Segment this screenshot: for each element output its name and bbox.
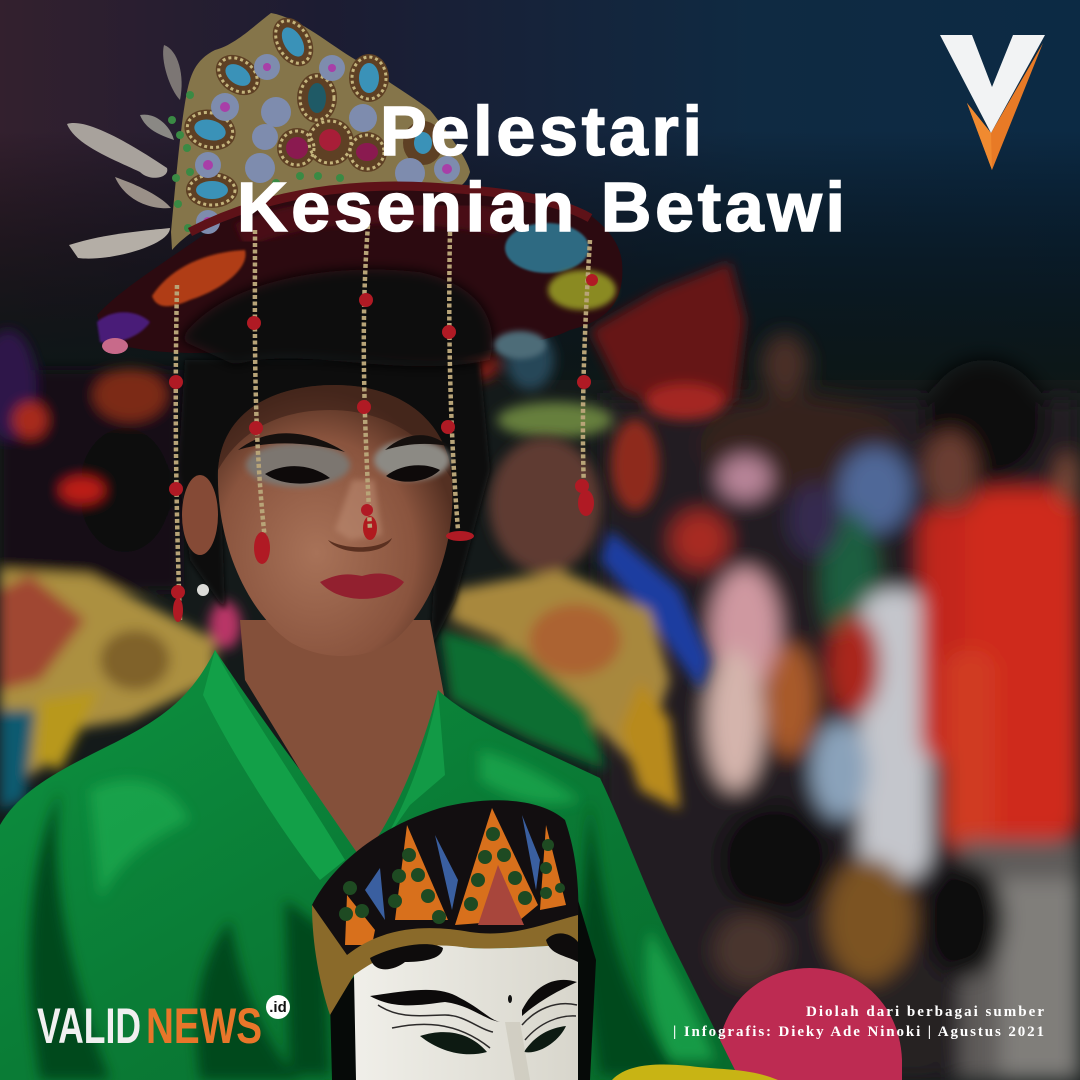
- eye shadow left: [246, 443, 350, 487]
- dark shadow around mask: [330, 900, 596, 1080]
- title line 2: Kesenian Betawi: [237, 168, 845, 246]
- News word: NEWS: [146, 998, 262, 1054]
- forehead pendant: [363, 516, 377, 540]
- left background dancer: [0, 330, 241, 810]
- headdress blue triangles: [365, 815, 540, 920]
- hat crown: gold beaded fan: [67, 10, 470, 259]
- face: [218, 385, 452, 656]
- feather lower left: [69, 228, 170, 259]
- green robe: [0, 650, 740, 1080]
- yellow yarn: [548, 270, 616, 310]
- feather small: [140, 115, 174, 140]
- nose: [335, 480, 382, 540]
- lips: [320, 574, 404, 599]
- mask headdress base: [312, 800, 578, 970]
- credit line 1: Diolah dari berbagai sumber: [806, 1004, 1044, 1020]
- hat trim: [190, 186, 590, 232]
- eye shadow right: [374, 440, 450, 480]
- crown flower centres: [203, 63, 452, 227]
- wayang mask: [312, 800, 578, 1080]
- headdress cream triangle: [478, 865, 524, 925]
- earring: [197, 584, 209, 596]
- Valid word: VALID: [37, 998, 141, 1054]
- mask white face: [354, 945, 578, 1080]
- neck: [240, 620, 445, 865]
- nostril shadow: [328, 538, 392, 552]
- hat dark underside: [180, 269, 492, 366]
- blue yarn: [505, 223, 589, 273]
- ear: [182, 475, 218, 555]
- robe collar right: [375, 690, 445, 855]
- robe collar left: [203, 650, 345, 880]
- title: [237, 92, 845, 246]
- hair: [178, 360, 490, 650]
- orange yarn: [152, 250, 246, 306]
- robe highlights: [90, 750, 715, 1060]
- eyes: [265, 465, 440, 484]
- headdress leaf dots: [339, 827, 565, 924]
- feather middle left: [115, 177, 171, 208]
- eyebrows: [238, 433, 448, 452]
- pink dome bottom right: [718, 968, 902, 1080]
- bead strings: [176, 225, 590, 620]
- mask eyes: [420, 1026, 566, 1054]
- red beads: [169, 274, 598, 622]
- id badge: [266, 995, 290, 1019]
- crown green dots: [168, 91, 344, 232]
- crown jewel frames: [180, 10, 443, 208]
- forehead shade: [218, 385, 452, 480]
- robe folds: [30, 790, 680, 1080]
- crown jewel red stones: [286, 83, 378, 161]
- pink yarn: [102, 338, 128, 354]
- yellow sash bottom: [612, 1065, 778, 1080]
- headdress gold band: [312, 905, 578, 1015]
- woman dancer: [0, 360, 740, 1080]
- maroon upper trim: [240, 211, 500, 236]
- red crown of background dancer: [460, 262, 745, 511]
- mask hair marks: [370, 933, 578, 969]
- logo: Validnews: .id: [269, 999, 287, 1016]
- purple yarn: [97, 312, 150, 343]
- source credit: [673, 1004, 1044, 1040]
- headdress orange triangles: [345, 808, 566, 945]
- hat: dark maroon disc with yarn: [97, 185, 622, 366]
- light blue tassel: [494, 331, 546, 359]
- mask decorative lines: [378, 1004, 577, 1048]
- credit line 2: | Infografis: Dieky Ade Ninoki | Agustus 2021: [673, 1024, 1044, 1040]
- crown flowers: [195, 54, 460, 234]
- blurred crowd on the right: [600, 333, 1080, 1080]
- mask nose shading: [505, 1022, 530, 1080]
- logo: V mark: [940, 35, 1045, 170]
- crown jewel beaded rings: [183, 15, 386, 205]
- mask dot: [508, 995, 512, 1003]
- crown jewel blue stones: [192, 24, 432, 199]
- background dancer behind the woman: [440, 437, 710, 810]
- mask eyebrows: [370, 980, 577, 1022]
- crown base: [171, 13, 470, 250]
- hat disc: [97, 185, 622, 361]
- title line 1: Pelestari: [380, 92, 702, 170]
- logo: Validnews: [37, 995, 290, 1054]
- feather upper left: [67, 123, 167, 178]
- feather top left: [163, 45, 182, 100]
